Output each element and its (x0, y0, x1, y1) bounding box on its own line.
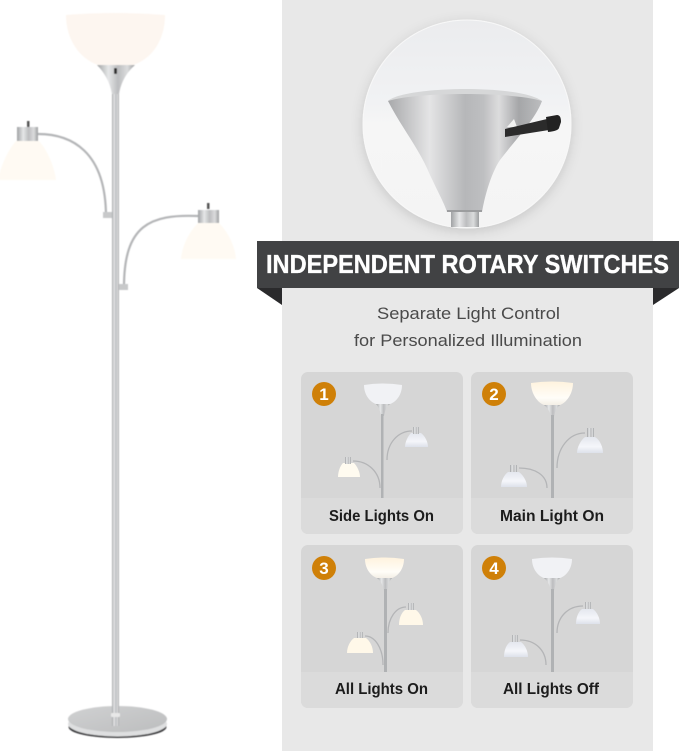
subtitle text: Separate Light Control (377, 305, 560, 323)
panel: card 1 side lights on (301, 372, 463, 534)
right side lamp (181, 203, 236, 259)
floor lamp: large product photo (0, 13, 236, 738)
heading banner (257, 241, 679, 305)
mini lamp 3 (347, 558, 423, 672)
number badge 3: 3 (319, 559, 329, 578)
number badge 3 (312, 556, 336, 580)
left side arm (38, 134, 112, 218)
number badge 1: 1 (319, 385, 329, 404)
lamp pole (112, 94, 119, 714)
right ribbon fold (653, 288, 679, 305)
number badge 2: 2 (489, 385, 499, 404)
number badge 4: 4 (489, 559, 499, 578)
subtitle text: for Personalized Illumination (354, 332, 582, 350)
panel: card 4 all lights off (471, 545, 633, 708)
mini lamp 2 (501, 382, 603, 498)
lamp base (68, 700, 167, 738)
subtitle text (354, 305, 582, 350)
funnel close-up (388, 89, 542, 227)
label: all lights on: All Lights On (335, 681, 428, 698)
detail circle: rotary switch close-up (363, 20, 571, 228)
main upper shade (66, 13, 165, 65)
right side arm (119, 216, 198, 290)
number badge 4 (482, 556, 506, 580)
label: all lights off: All Lights Off (503, 681, 600, 698)
mini lamp 1 (338, 384, 428, 498)
label: main light on: Main Light On (500, 508, 604, 525)
left ribbon fold (257, 288, 282, 305)
left side lamp (0, 121, 56, 180)
panel: card 2 main light on (471, 372, 633, 534)
number badge 2 (482, 382, 506, 406)
number badge 1 (312, 382, 336, 406)
panel: card 3 all lights on (301, 545, 463, 708)
main funnel with switch (97, 65, 135, 94)
mini lamp 4 (504, 558, 600, 672)
rotary switch knob (505, 115, 561, 137)
panel: grey right column (282, 0, 653, 751)
label: side lights on: Side Lights On (329, 508, 434, 525)
